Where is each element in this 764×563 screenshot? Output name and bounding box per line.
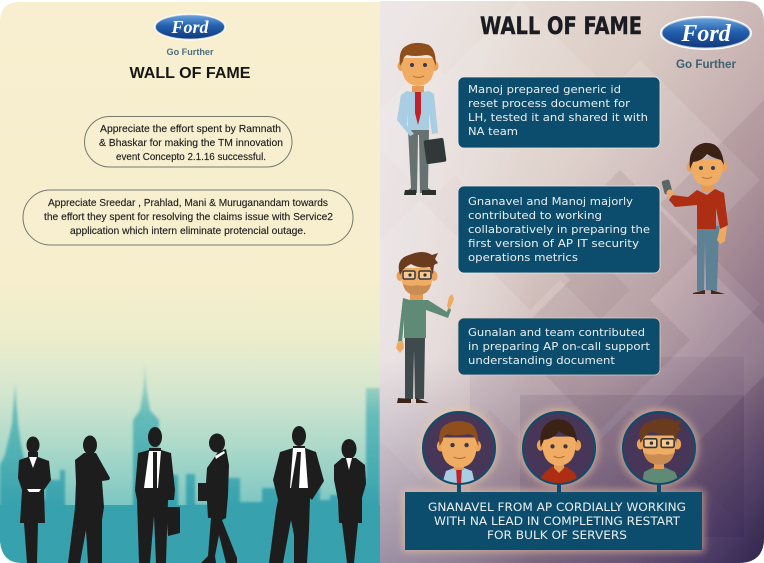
figure: man with tie and briefcase — [397, 43, 447, 195]
text box: Manoj — [458, 77, 660, 148]
banner: Gnanavel: FOR BULK OF SERVERS — [487, 528, 627, 542]
callout: Ramnath and Bhaskar — [84, 116, 292, 167]
callout: Ramnath and Bhaskar: Appreciate the effort spent by Ramnath — [100, 123, 281, 135]
city skyline — [0, 362, 381, 563]
text box: Gnanavel and Manoj: Gnanavel and Manoj majorly — [468, 195, 634, 208]
figure: man with phone and red sweater — [661, 143, 728, 294]
banner: Gnanavel: WITH NA LEAD IN COMPLETING RESTART — [434, 514, 681, 528]
banner: Gnanavel — [403, 490, 704, 552]
banner: Gnanavel: GNANAVEL FROM AP CORDIALLY WORKING — [428, 500, 686, 514]
text box: Gunalan: in preparing AP on-call support — [468, 340, 651, 353]
text box: Gnanavel and Manoj: contributed to working — [468, 209, 602, 222]
text box: Gnanavel and Manoj — [458, 186, 660, 273]
callout: Sreedar, Prahlad, Mani and Muruganandam — [23, 190, 353, 245]
text box: Gnanavel and Manoj: first version of AP IT security — [468, 237, 640, 250]
text box: Gnanavel and Manoj: operations metrics — [468, 251, 578, 264]
silhouette: woman 1 — [18, 436, 51, 563]
text box: Manoj: LH, tested it and shared it with — [468, 111, 648, 124]
callout: Ramnath and Bhaskar: event Concepto 2.1.16 successful. — [116, 151, 266, 163]
logo: left Ford: Ford — [170, 17, 210, 37]
callout: Sreedar, Prahlad, Mani and Muruganandam: application which intern eliminate protencial outage. — [70, 225, 306, 237]
text box: Manoj: NA team — [468, 125, 518, 138]
avatar: man with tie — [420, 409, 498, 493]
callout: Sreedar, Prahlad, Mani and Muruganandam: the effort they spent for resolving the claims issue with Service2 — [44, 211, 333, 223]
text box: Gunalan: understanding document — [468, 354, 616, 367]
text box: Gunalan: Gunalan and team contributed — [468, 326, 645, 339]
callout: Sreedar, Prahlad, Mani and Muruganandam: Appreciate Sreedar , Prahlad, Mani & Muruganandam towards — [48, 197, 328, 209]
avatar: man with glasses — [620, 409, 698, 493]
text box: Gunalan — [458, 318, 660, 375]
silhouette: man 5 hands in pockets — [269, 426, 324, 563]
text box: Gnanavel and Manoj: collaboratively in preparing the — [468, 223, 650, 236]
panel: left poster — [0, 0, 381, 563]
logo: left Ford — [154, 14, 226, 40]
callout: Ramnath and Bhaskar: & Bhaskar for making the TM innovation — [99, 137, 283, 149]
silhouette: woman 4 with folder — [198, 434, 237, 563]
tagline: left: Go Further — [166, 47, 214, 57]
silhouette: man 3 with briefcase — [135, 427, 180, 563]
silhouette: woman 6 — [334, 439, 366, 563]
title: left: WALL OF FAME — [130, 65, 251, 82]
title: right hand-lettered: WALL OF FAME — [480, 12, 642, 40]
panel: right poster — [380, 1, 764, 563]
logo: right Ford: Ford — [680, 21, 732, 47]
avatars with connectors — [420, 409, 698, 493]
logo: right Ford — [660, 16, 752, 50]
avatar: man in red sweater — [520, 409, 598, 493]
figure: man with glasses and green sweater — [396, 252, 454, 403]
tagline: right: Go Further — [676, 57, 736, 71]
text box: Manoj: reset process document for — [468, 97, 631, 110]
text box: Manoj: Manoj prepared generic id — [468, 83, 621, 96]
silhouette: man 2 with folded arms — [68, 436, 110, 563]
